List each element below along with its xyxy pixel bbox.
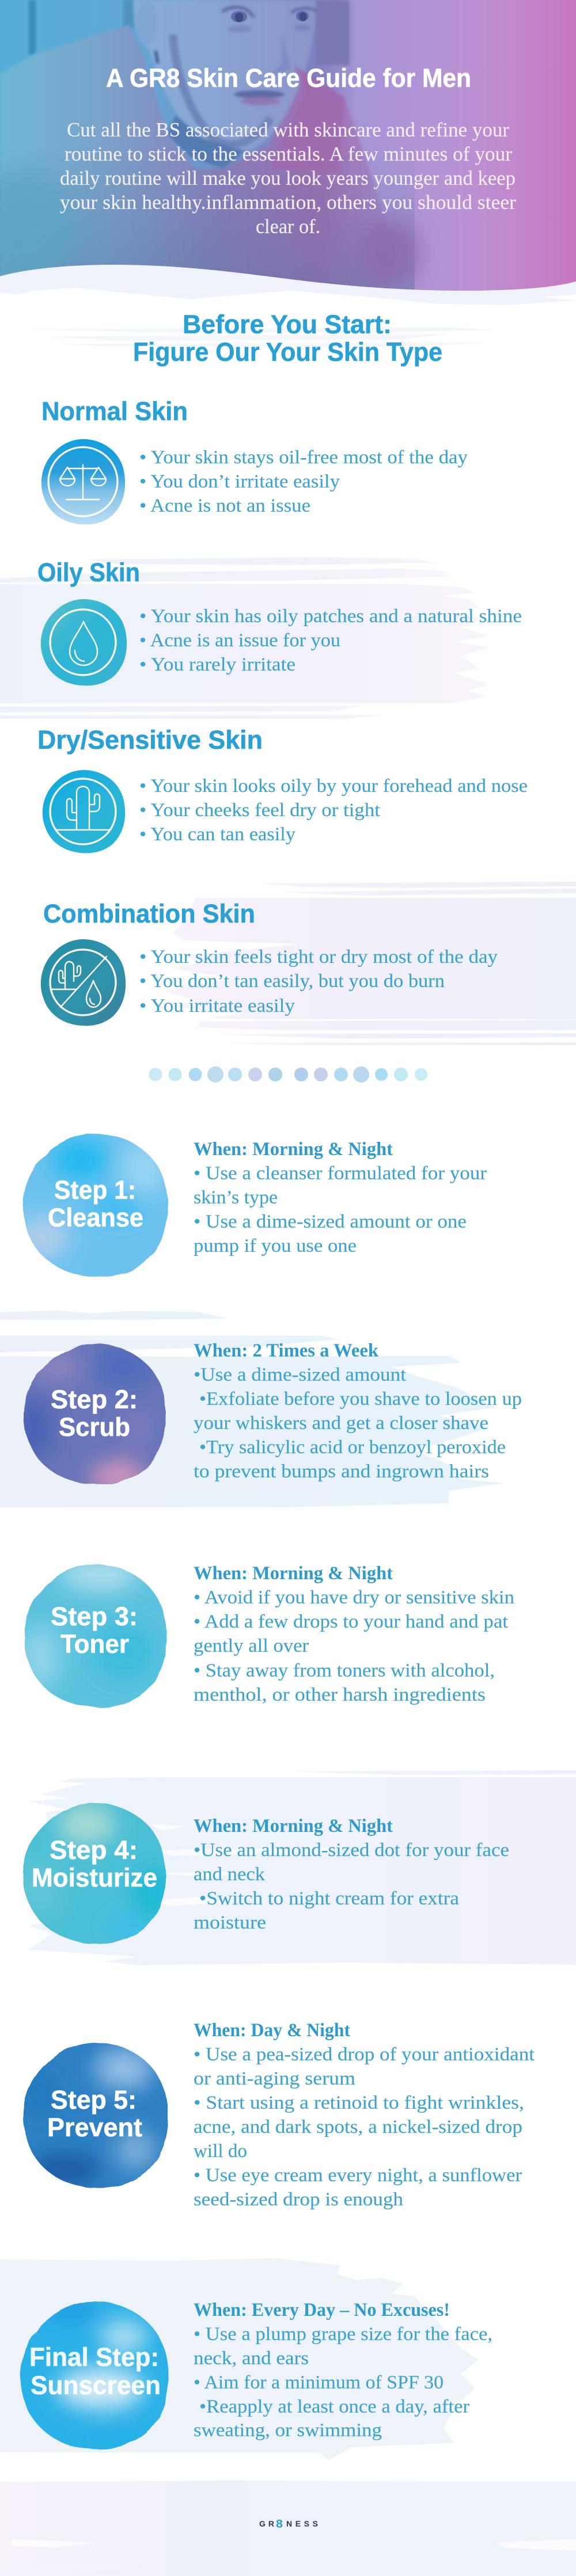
- text: step 1 instructions: When: Morning & Night: [194, 1139, 393, 1160]
- text: final step instructions: • Use a plump grape size for the face,: [194, 2324, 492, 2345]
- text: final step instructions: When: Every Day – No Excuses!: [194, 2300, 450, 2320]
- blob: step 2: [17, 1338, 173, 1493]
- list: normal skin traits: • You don’t irritate easily: [139, 471, 340, 492]
- list: dry skin traits: • Your cheeks feel dry or tight: [139, 800, 380, 821]
- panel: combination skin: [35, 899, 498, 1030]
- label: step 1: Step 1:: [54, 1175, 136, 1205]
- photo lower shadow: [0, 175, 415, 290]
- text: step 3 instructions: • Stay away from toners with alcohol,: [194, 1660, 495, 1681]
- shirt in the photo: [0, 25, 397, 299]
- text: final step instructions: • Aim for a minimum of SPF 30: [194, 2372, 444, 2393]
- list: normal skin traits: • Acne is not an issue: [139, 496, 310, 516]
- watercolor dot divider: [149, 1066, 427, 1083]
- list: oily skin traits: [139, 606, 522, 675]
- text: step 4 instructions: [194, 1816, 509, 1933]
- list: dry skin traits: • Your skin looks oily by your forehead and nose: [139, 776, 528, 797]
- list: normal skin traits: [139, 447, 468, 516]
- list: oily skin traits: • Your skin has oily patches and a natural shine: [139, 606, 522, 627]
- footer band: [0, 2480, 576, 2576]
- list: oily skin traits: • Acne is an issue for you: [139, 630, 340, 651]
- text: step 3 instructions: gently all over: [194, 1636, 309, 1656]
- text: step 1 instructions: skin’s type: [194, 1187, 278, 1208]
- list: combination skin traits: • Your skin feels tight or dry most of the day: [139, 947, 498, 967]
- facial features: [137, 1, 317, 105]
- panel: final step sunscreen: [14, 2296, 492, 2455]
- hero intro paragraph: Cut all the BS associated with skincare and refine your: [67, 119, 509, 141]
- hero title: A GR8 Skin Care Guide for Men: [106, 63, 471, 93]
- window frame in the photo: [29, 0, 134, 55]
- brush: step 4 background: [29, 1770, 576, 1965]
- text: step 3 instructions: [194, 1563, 514, 1705]
- label: step 3: Toner: [60, 1629, 129, 1659]
- text: step 1 instructions: • Use a cleanser formulated for your: [194, 1163, 487, 1184]
- panel: normal skin: [35, 397, 468, 529]
- panel: step 3 toner: [17, 1557, 514, 1715]
- panel: dry sensitive skin: [35, 725, 528, 858]
- text: step 2 instructions: [194, 1340, 522, 1482]
- heading: normal skin: Normal Skin: [41, 397, 188, 426]
- icon: cactus: [43, 770, 126, 853]
- label: step 4: [32, 1835, 157, 1892]
- text: step 3 instructions: • Avoid if you have dry or sensitive skin: [194, 1587, 514, 1608]
- text: step 3 instructions: When: Morning & Night: [194, 1563, 393, 1584]
- brush: final step background: [0, 2258, 478, 2460]
- text: step 5 instructions: [194, 2020, 535, 2210]
- text: step 4 instructions: •Switch to night cream for extra: [199, 1888, 459, 1909]
- panel: step 5 prevent: [17, 2020, 535, 2210]
- label: step 5: Step 5:: [51, 2085, 137, 2114]
- brush: combination skin background: [164, 882, 576, 1045]
- text: step 4 instructions: and neck: [194, 1864, 266, 1885]
- text: step 1 instructions: pump if you use one: [194, 1236, 357, 1256]
- text: step 5 instructions: will do: [194, 2141, 247, 2162]
- logo: GR8NESS: NESS: [286, 2519, 318, 2528]
- text: step 5 instructions: When: Day & Night: [194, 2020, 350, 2041]
- label: step 4: Step 4:: [50, 1835, 138, 1865]
- brush: white streaks near step 4: [150, 1824, 351, 1906]
- hero intro paragraph: routine to stick to the essentials. A few minutes of your: [65, 143, 512, 165]
- text: step 4 instructions: When: Morning & Night: [194, 1816, 393, 1836]
- neck shadow: [167, 115, 245, 169]
- label: final step: Final Step:: [29, 2342, 159, 2372]
- heading: combination skin: Combination Skin: [43, 899, 255, 928]
- text: step 2 instructions: •Try salicylic acid or benzoyl peroxide: [199, 1437, 506, 1458]
- text: step 4 instructions: •Use an almond-sized dot for your face: [194, 1840, 509, 1861]
- logo: GR8NESS: 8: [276, 2518, 283, 2531]
- list: combination skin traits: • You irritate easily: [139, 996, 295, 1016]
- icon: cactus and drop crossed: [35, 935, 132, 1030]
- hero intro paragraph: your skin healthy.inflammation, others you should steer: [60, 191, 516, 214]
- list: normal skin traits: • Your skin stays oil-free most of the day: [139, 447, 468, 468]
- panel: step 1 cleanse: [17, 1128, 487, 1283]
- text: step 2 instructions: •Exfoliate before you shave to loosen up: [199, 1389, 522, 1409]
- text: step 1 instructions: [194, 1139, 487, 1256]
- hero banner with tinted photo: [0, 0, 576, 299]
- label: step 3: Step 3:: [51, 1602, 138, 1631]
- hero intro paragraph: clear of.: [256, 215, 320, 238]
- text: step 5 instructions: • Start using a retinoid to fight wrinkles,: [194, 2093, 524, 2113]
- label: step 2: [51, 1385, 138, 1442]
- panel: step 2 scrub: [17, 1338, 522, 1493]
- blob: step 4: [14, 1798, 173, 1951]
- list: oily skin traits: • You rarely irritate: [139, 654, 295, 675]
- text: step 4 instructions: moisture: [194, 1912, 266, 1933]
- text: step 2 instructions: •Use a dime-sized amount: [194, 1365, 406, 1385]
- text: step 2 instructions: When: 2 Times a Week: [194, 1340, 379, 1361]
- brush: step 2 background: [0, 1310, 505, 1507]
- label: step 5: Prevent: [47, 2113, 142, 2142]
- brush: heading streaks: [23, 327, 495, 347]
- text: final step instructions: sweating, or swimming: [194, 2420, 382, 2441]
- label: step 4: Moisturize: [32, 1863, 157, 1892]
- label: final step: [29, 2342, 161, 2400]
- list: combination skin traits: [139, 947, 498, 1016]
- text: step 5 instructions: acne, and dark spots, a nickel-sized drop: [194, 2117, 522, 2137]
- label: final step: Sunscreen: [31, 2371, 161, 2400]
- label: step 2: Step 2:: [51, 1385, 138, 1414]
- blob: step 5: [17, 2037, 173, 2193]
- brush: oily skin background: [0, 557, 490, 719]
- list: dry skin traits: [139, 776, 528, 845]
- blob: step 3: [17, 1557, 173, 1715]
- icon: balance scale: [41, 439, 126, 525]
- text: step 5 instructions: • Use a pea-sized drop of your antioxidant: [194, 2044, 535, 2065]
- section heading: Before You Start:: [183, 310, 392, 339]
- text: final step instructions: •Reapply at least once a day, after: [199, 2396, 469, 2417]
- text: step 1 instructions: • Use a dime-sized amount or one: [194, 1211, 467, 1232]
- panel: step 4 moisturize: [14, 1798, 509, 1951]
- text: step 2 instructions: your whiskers and get a closer shave: [194, 1413, 488, 1434]
- panel: oily skin: [35, 558, 522, 691]
- text: step 5 instructions: seed-sized drop is enough: [194, 2189, 404, 2210]
- text: step 3 instructions: menthol, or other harsh ingredients: [194, 1685, 486, 1705]
- heading: oily skin: Oily Skin: [37, 558, 140, 587]
- text: step 2 instructions: to prevent bumps and ingrown hairs: [194, 1461, 489, 1482]
- label: step 2: Scrub: [59, 1412, 130, 1442]
- logo: GR8NESS: GR: [259, 2519, 274, 2528]
- section heading: Figure Our Your Skin Type: [133, 337, 442, 367]
- heading: dry sensitive skin: Dry/Sensitive Skin: [37, 725, 263, 754]
- section heading: [133, 310, 442, 367]
- shadow right arm: [363, 219, 420, 288]
- icon: water drop: [40, 599, 127, 686]
- label: step 1: Cleanse: [48, 1203, 143, 1232]
- list: combination skin traits: • You don’t tan easily, but you do burn: [139, 971, 445, 992]
- text: final step instructions: neck, and ears: [194, 2348, 309, 2369]
- logo: GR8NESS: [259, 2518, 318, 2531]
- blob: final step: [14, 2296, 173, 2455]
- hero intro paragraph: [60, 119, 516, 238]
- text: step 5 instructions: • Use eye cream every night, a sunflower: [194, 2165, 522, 2186]
- text: step 5 instructions: or anti-aging serum: [194, 2068, 355, 2089]
- collar in the photo: [271, 65, 344, 173]
- label: step 3: [51, 1602, 138, 1659]
- list: dry skin traits: • You can tan easily: [139, 824, 296, 845]
- text: final step instructions: [194, 2300, 492, 2441]
- beard: [173, 35, 271, 144]
- hero intro paragraph: daily routine will make you look years younger and keep: [60, 167, 516, 189]
- head in the photo: [134, 0, 316, 151]
- background shadow beside head: [316, 0, 350, 65]
- label: step 5: [47, 2085, 142, 2142]
- brush: under hero wave: [0, 259, 576, 305]
- far left shirt tone: [0, 173, 75, 276]
- text: step 3 instructions: • Add a few drops to your hand and pat: [194, 1611, 508, 1632]
- eyes: [231, 11, 309, 22]
- label: step 1: [48, 1175, 143, 1232]
- blob: step 1: [17, 1128, 173, 1283]
